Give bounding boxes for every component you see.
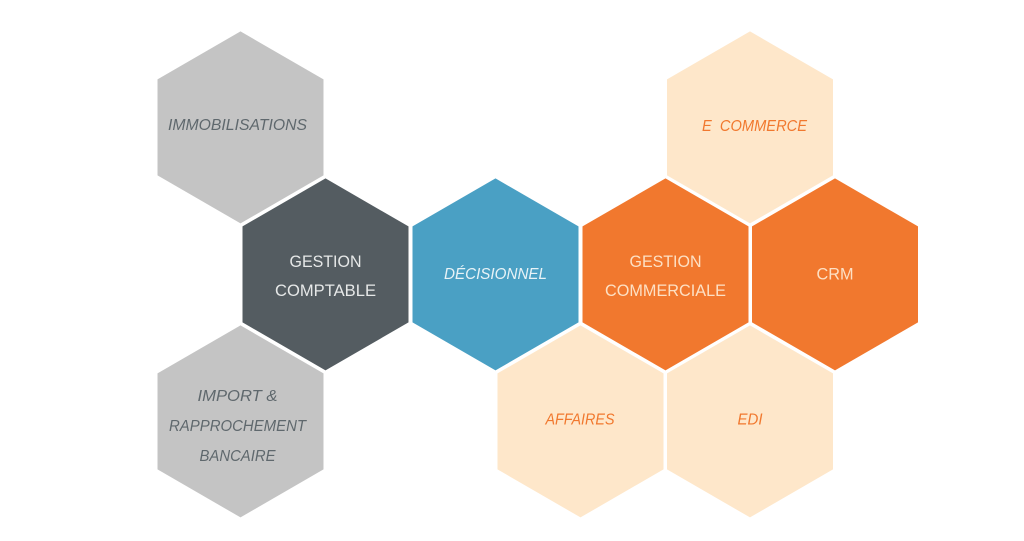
hexagon: CRM [752,178,918,370]
hexagon: gestion comptable [242,178,408,370]
hexagon: immobilisations: IMMOBILISATIONS [168,117,307,134]
hexagon: e commerce [667,31,833,223]
hexagon: gestion commerciale: GESTION [630,253,702,271]
hexagon: gestion comptable: GESTION [290,253,362,271]
hexagon: import et rapprochement bancaire [158,325,324,517]
hexagon: gestion commerciale: COMMERCIALE [605,282,726,300]
hexagon: import et rapprochement bancaire: BANCAIRE [200,448,276,465]
hexagon: CRM: CRM [816,266,854,284]
hexagon: décisionnel [412,178,578,370]
hexagon: immobilisations [158,31,324,223]
hexagon: import et rapprochement bancaire: RAPPROCHEMENT [169,418,307,435]
hexagon: EDI [667,325,833,517]
hexagon: import et rapprochement bancaire: IMPORT & [198,388,278,405]
hexagon: décisionnel: DÉCISIONNEL [444,264,547,283]
hexagon: e commerce: E COMMERCE [702,118,807,135]
hexagon: EDI: EDI [738,412,763,428]
hexagon: gestion commerciale [582,178,748,370]
hexagon: affaires [498,325,664,517]
hexagon: gestion comptable: COMPTABLE [275,282,376,300]
hexagon: affaires: AFFAIRES [545,412,615,428]
